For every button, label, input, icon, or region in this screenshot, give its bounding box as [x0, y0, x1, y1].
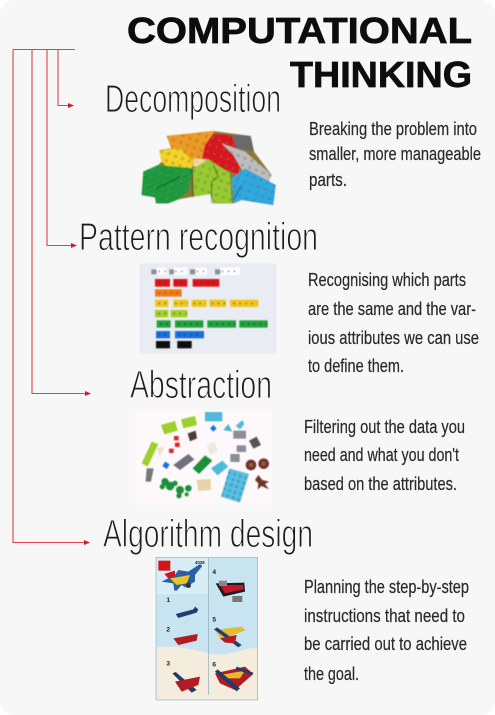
heading: Algorithm design: Algorithm design — [103, 513, 313, 556]
title: THINKING — [290, 54, 472, 95]
title — [127, 10, 472, 95]
heading: Decomposition: Decomposition — [105, 78, 281, 121]
step drawings — [172, 581, 253, 693]
text: abstraction description: need and what you don't — [304, 445, 459, 465]
text: abstraction description: based on the attributes. — [304, 474, 457, 494]
image: scattered bricks — [135, 410, 272, 505]
cover plane — [158, 561, 202, 591]
text: algorithm design description: the goal. — [304, 664, 359, 684]
step numbers: 4038 — [195, 560, 205, 565]
step numbers: 1 — [166, 597, 170, 604]
title: COMPUTATIONAL — [127, 10, 472, 51]
heading: Pattern recognition: Pattern recognition — [79, 216, 318, 259]
flow connector arrows — [13, 50, 91, 545]
step numbers: 6 — [212, 661, 216, 668]
text: pattern recognition description — [308, 270, 479, 376]
heading: Abstraction: Abstraction — [130, 364, 272, 407]
step numbers: 5 — [212, 616, 216, 623]
step numbers: 2 — [166, 627, 170, 634]
image: building instructions — [156, 557, 258, 700]
text: decomposition description — [309, 119, 481, 190]
step numbers — [166, 560, 216, 668]
text: algorithm design description: instructions that need to — [304, 606, 465, 626]
image: pile of bricks — [142, 131, 276, 205]
image: bricks sorted by colour — [139, 263, 277, 353]
step numbers: 3 — [166, 661, 170, 668]
text: algorithm design description — [304, 577, 469, 684]
step numbers: 4 — [212, 569, 216, 576]
text: decomposition description: parts. — [309, 170, 347, 190]
text: abstraction description — [304, 417, 465, 494]
text: pattern recognition description: to define them. — [308, 356, 404, 376]
